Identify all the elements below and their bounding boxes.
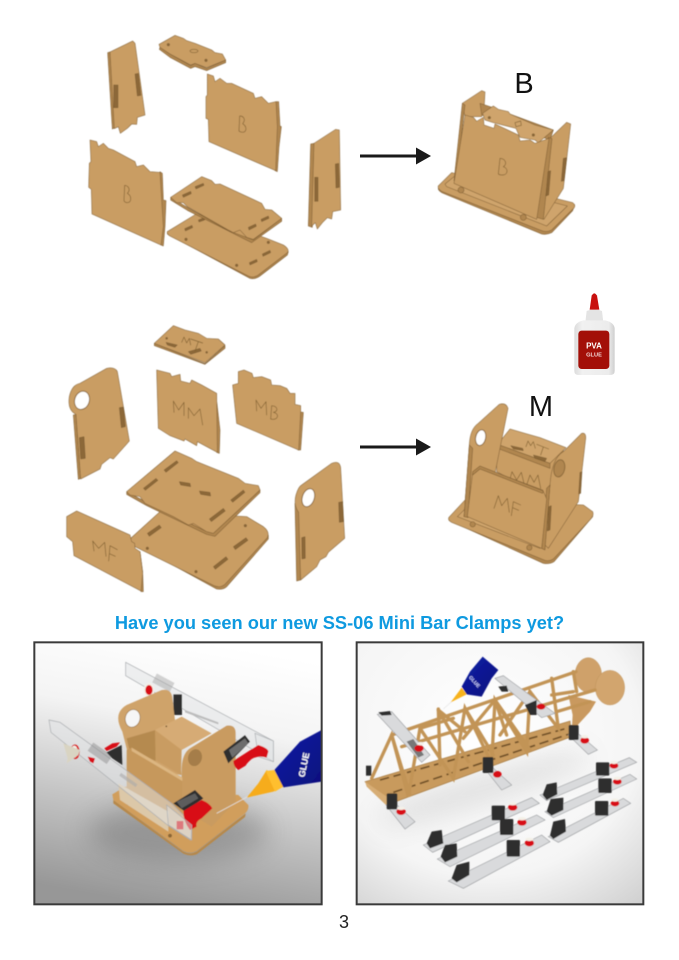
handwritten MT [182, 337, 203, 351]
label: M: M [529, 391, 553, 423]
label: B: B [514, 68, 534, 100]
letter B [124, 185, 131, 203]
glue bottle [462, 657, 498, 697]
near clamp rail [49, 720, 192, 840]
icon: PVA glue bottle: GLUE [586, 352, 602, 358]
glue tip thread [217, 797, 248, 813]
part: top plate [159, 35, 226, 71]
bottle label [578, 331, 609, 369]
exploded parts: box M [67, 326, 345, 592]
right side [540, 122, 571, 219]
photo panel: box in clamps with glue [34, 642, 322, 904]
part: base plate [167, 213, 288, 279]
handwritten MM [173, 401, 203, 425]
handwritten MB [256, 400, 277, 419]
deck slot pattern [380, 728, 567, 780]
part: lower plate with slots [171, 177, 282, 243]
right handle side [182, 725, 236, 827]
part: upper plate with slots [127, 451, 260, 536]
letter B [239, 116, 246, 132]
shadows [386, 748, 581, 828]
left handle side [464, 404, 508, 517]
part: back panel B [206, 74, 281, 172]
right handle side [545, 433, 586, 548]
icon: PVA glue bottle [574, 293, 615, 375]
paddle ends [575, 658, 602, 692]
back wall and top [480, 103, 553, 140]
assembled box M [449, 404, 593, 564]
shadow [88, 802, 268, 862]
exploded parts: box B [89, 35, 341, 279]
shaded back wall [127, 730, 156, 761]
part: right side panel [308, 129, 341, 229]
glue nozzle [246, 770, 276, 798]
part: left handle panel [69, 368, 129, 479]
arrow: to box B [360, 148, 431, 164]
frame [357, 642, 643, 904]
loose clamps, left group [423, 798, 539, 852]
MF front panel [467, 467, 547, 548]
bridge deck [365, 721, 572, 805]
bridge feet clamps [386, 802, 415, 829]
clamp on bridge, left [377, 712, 430, 762]
part: MT top plate [154, 326, 225, 364]
arrow: to box M [360, 438, 431, 456]
handwritten MF [93, 541, 117, 561]
clamp on bridge, right [495, 676, 555, 718]
frame [34, 642, 322, 904]
dowels [470, 522, 475, 527]
wall seen through rail [118, 783, 168, 832]
far clamp rail [126, 662, 273, 762]
heading: Have you seen our new SS-06 Mini Bar Clamps yet? [115, 612, 564, 633]
base plate [112, 787, 248, 853]
page number: 3 [339, 912, 349, 932]
part: base plate [130, 512, 268, 589]
bottle cap [590, 293, 599, 310]
front wall [126, 749, 182, 812]
photo panel: truss bridge and clamps [357, 642, 643, 904]
handle side back [118, 690, 182, 775]
base plate [449, 512, 593, 564]
near clamp jaws [173, 790, 203, 812]
photo panel: box in clamps with glue: GLUE [297, 752, 311, 778]
part: MF panel [67, 511, 143, 592]
icon: PVA glue bottle: PVA [586, 341, 602, 350]
photo panel: truss bridge and clamps: GLUE [467, 675, 481, 690]
bottle body [574, 320, 615, 375]
front panel [454, 115, 549, 219]
part: left side panel [108, 41, 145, 133]
inner block [497, 432, 563, 498]
assembled box B [438, 91, 575, 234]
bottle neck [585, 309, 603, 322]
part: MM panel [157, 370, 220, 453]
base plate [438, 186, 575, 234]
left side [462, 91, 485, 117]
handwritten MF [494, 496, 521, 516]
dowels [458, 187, 464, 193]
glue bottle [274, 730, 322, 787]
part: right handle panel [295, 462, 345, 581]
part: MB panel [233, 370, 303, 450]
glue tip [443, 702, 452, 709]
letter B [498, 158, 507, 175]
inner block [158, 733, 182, 774]
truss [372, 678, 558, 797]
far clamp jaws [223, 735, 250, 763]
part: front panel B [89, 140, 166, 246]
loose clamps, right group [540, 758, 637, 801]
